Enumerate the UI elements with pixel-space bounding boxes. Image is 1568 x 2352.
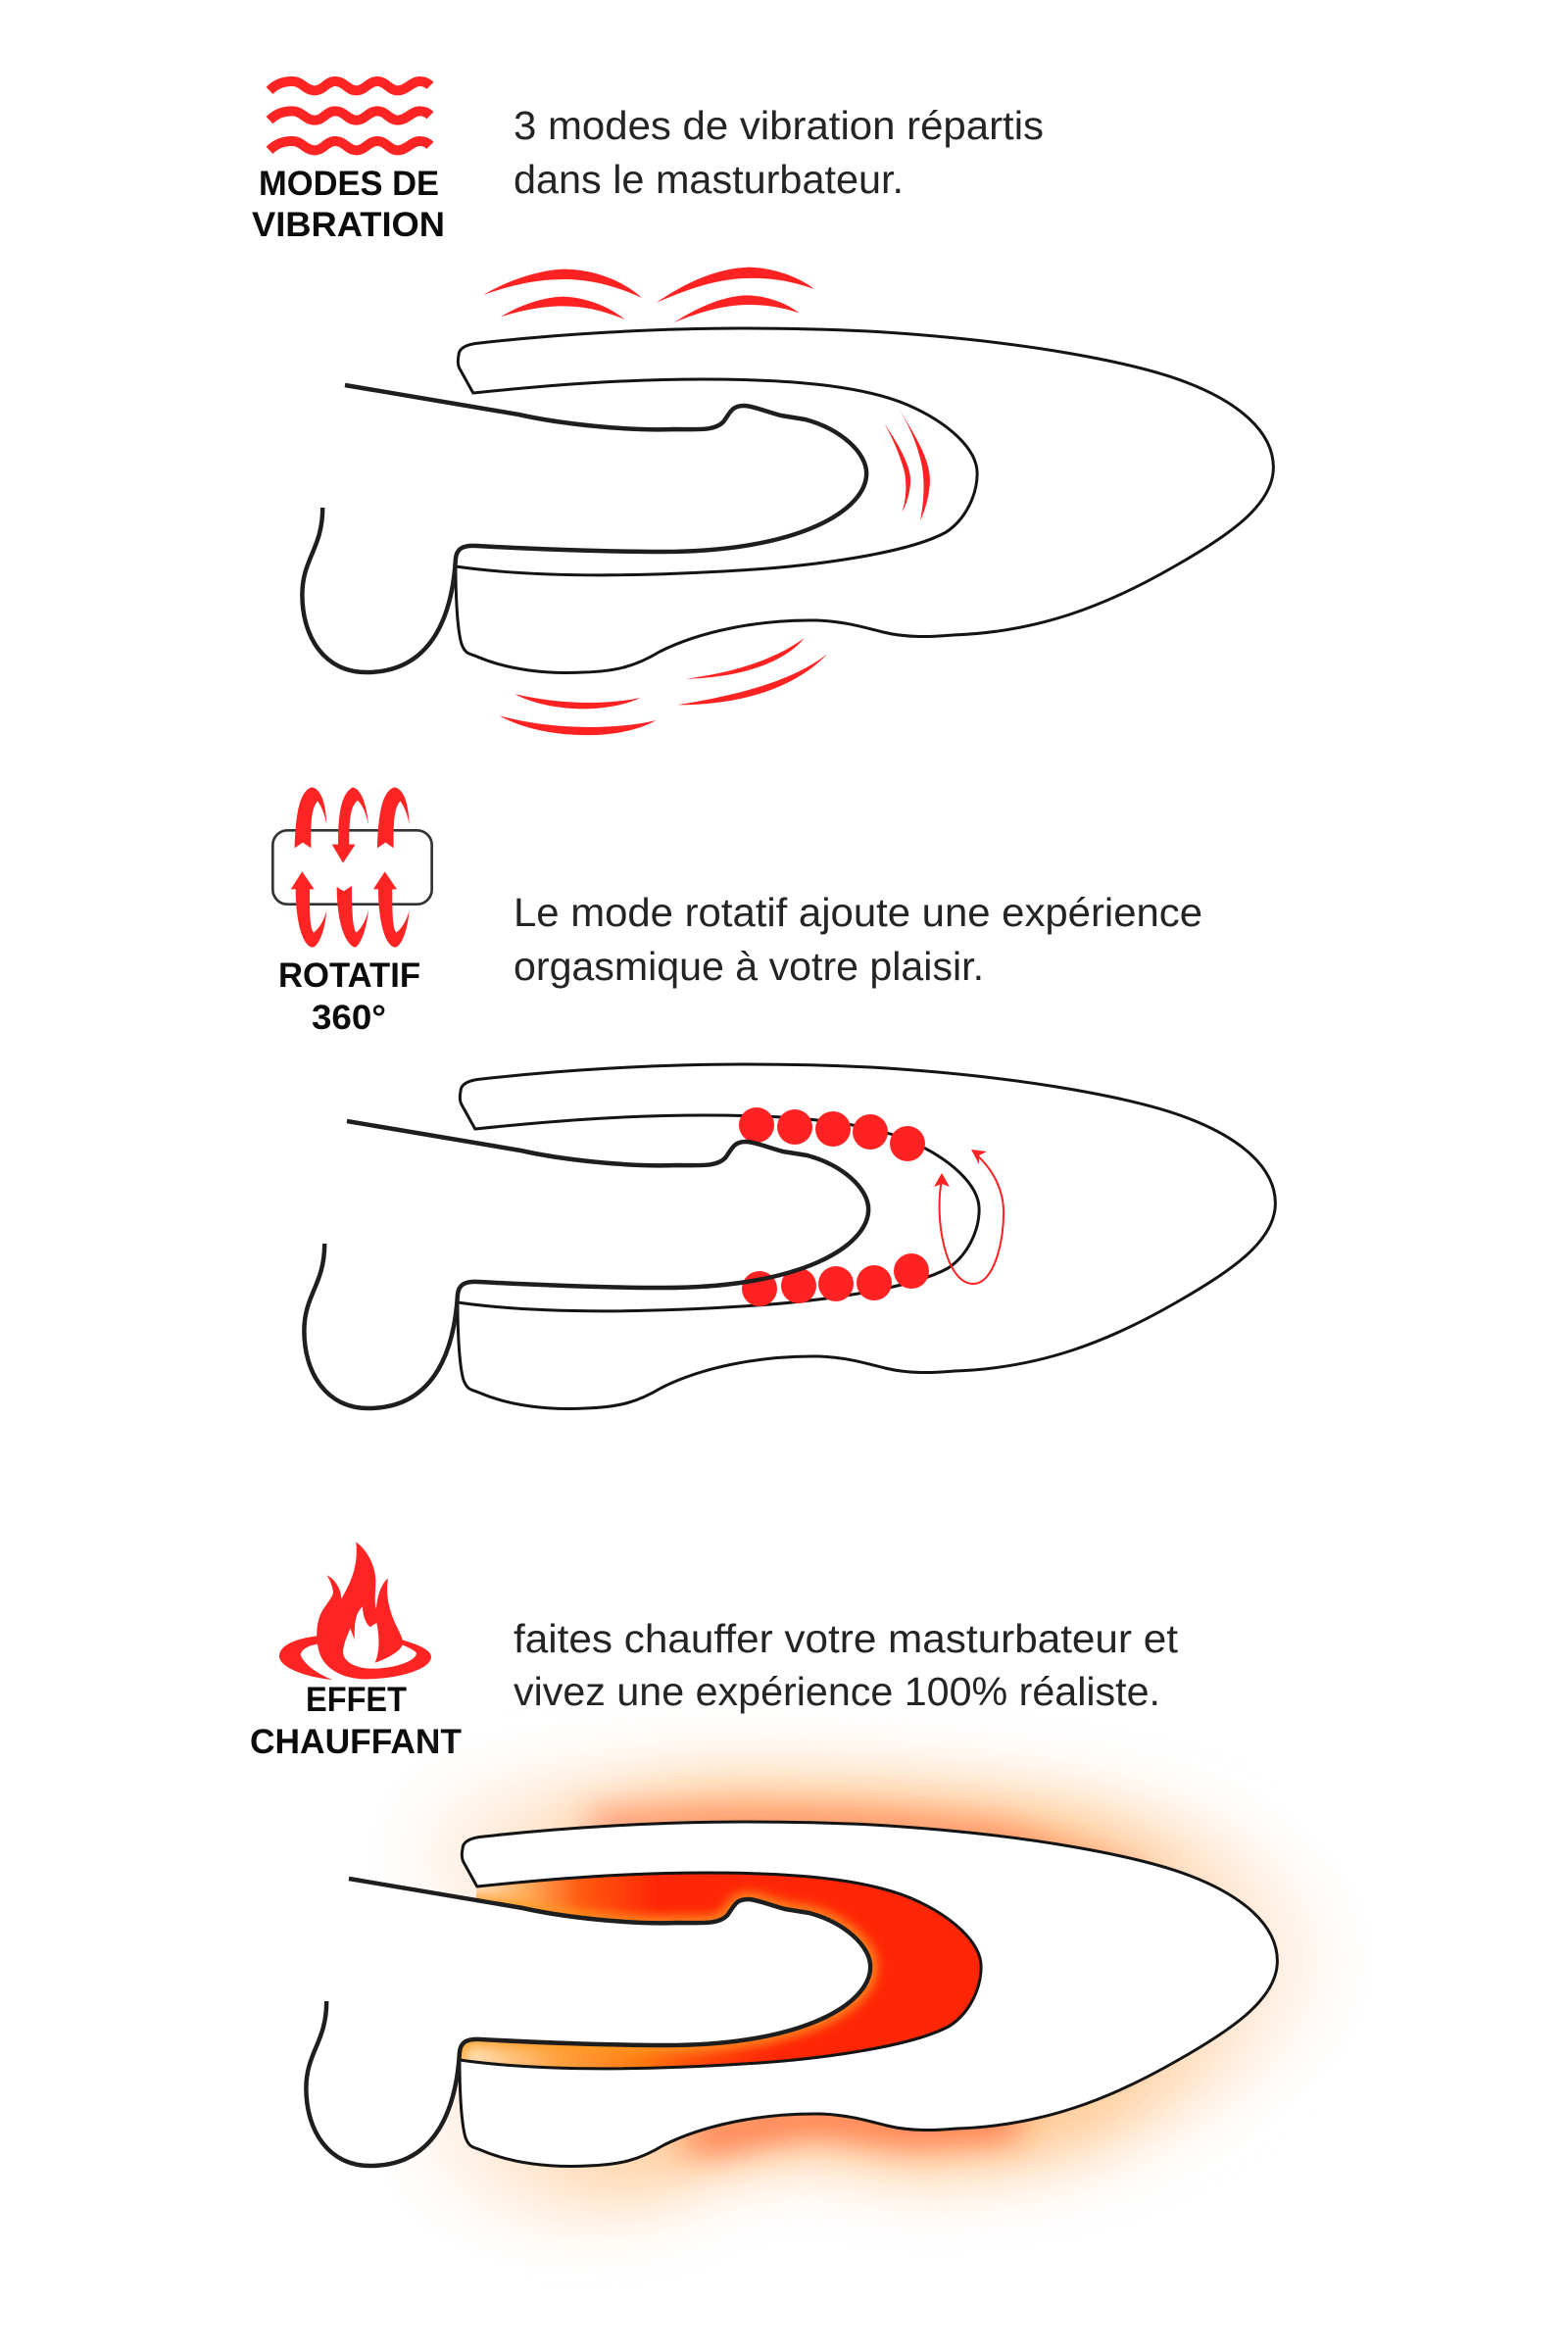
label: effet chauffant: EFFET [306, 1681, 407, 1719]
icon: rotation arrows around ring [272, 787, 432, 948]
body fill and outlines [306, 1822, 1277, 2166]
diagram: heated sleeve and body [306, 1822, 1277, 2166]
beads [739, 1107, 929, 1306]
icon: flame over ring [279, 1542, 431, 1680]
infographic canvas [251, 76, 1334, 2247]
label: rotatif 360: 360° [312, 999, 386, 1037]
arrow: rotation loop [934, 1150, 1004, 1284]
vibration marks [483, 268, 930, 735]
outer heat glow [460, 1822, 1277, 2166]
text: vibration description: 3 modes de vibration répartis [514, 103, 1044, 148]
diagram: sleeve outline with rotating beads [304, 1064, 1275, 1408]
text: vibration description: dans le masturbateur. [514, 157, 904, 202]
label: effet chauffant: CHAUFFANT [250, 1723, 462, 1761]
text: rotation description: Le mode rotatif ajoute une expérience [514, 890, 1202, 935]
inner heat gradient [461, 1874, 980, 2068]
text: heating description: vivez une expérience 100% réaliste. [514, 1669, 1160, 1714]
section: vibration modes [252, 81, 1273, 735]
text: heating description: faites chauffer votre masturbateur et [514, 1616, 1179, 1661]
text: rotation description: orgasmique à votre plaisir. [514, 944, 984, 989]
section: rotation 360 [272, 787, 1275, 1408]
label: rotatif 360: ROTATIF [278, 956, 420, 995]
icon: vibration waves [270, 81, 430, 150]
diagram: sleeve and body outline [302, 328, 1273, 672]
sleeve fill [460, 1822, 1277, 2166]
label: modes de vibration: MODES DE [259, 165, 439, 203]
label: modes de vibration: VIBRATION [252, 206, 445, 244]
section: heating effect [250, 1542, 1277, 2166]
